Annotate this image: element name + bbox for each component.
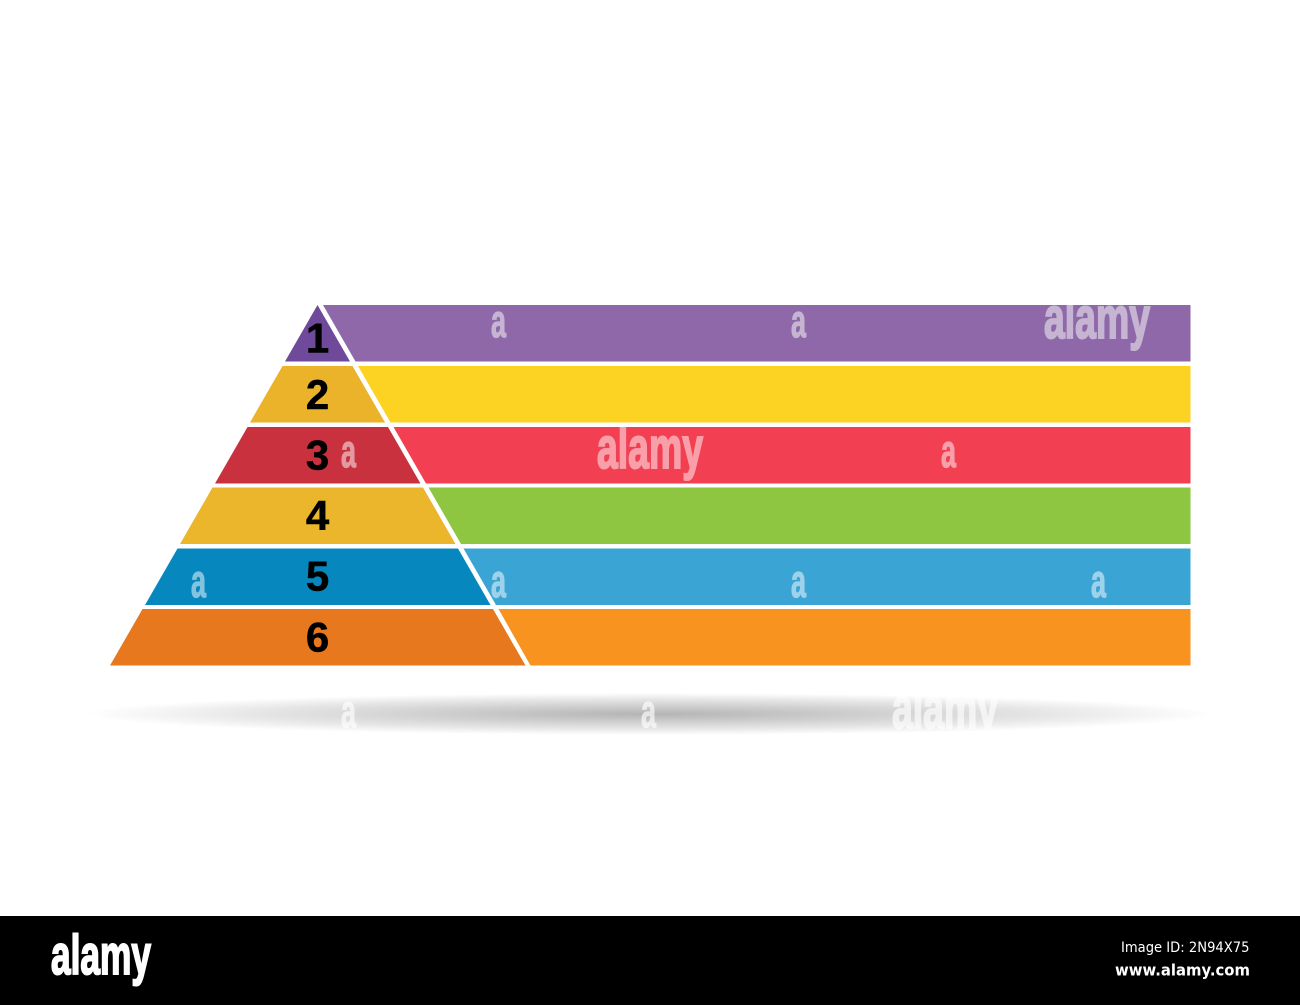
number 2: 2 <box>306 371 329 418</box>
watermark row 5 left: a <box>491 555 506 607</box>
bar 4 green <box>428 488 1190 544</box>
ground shadow <box>85 693 1215 735</box>
number 1: 1 <box>306 314 329 362</box>
watermark row 1: a <box>491 295 506 347</box>
pyramid level 5 <box>145 548 490 605</box>
pyramid level 3 <box>215 427 420 484</box>
watermark row 3 left: a <box>341 425 356 477</box>
number 4: 4 <box>306 492 330 539</box>
watermark row 5 centre: a <box>791 555 806 607</box>
pyramid level 6 <box>110 609 526 666</box>
infographic canvas <box>0 305 1300 1005</box>
bar 6 orange <box>498 609 1190 666</box>
watermark logo row 3: alamy <box>597 416 703 481</box>
bar 2 yellow <box>358 366 1190 422</box>
number 3: 3 <box>306 432 329 478</box>
watermark logo shadow: alamy <box>892 676 998 741</box>
footer background <box>0 916 1300 1005</box>
watermark row 5 right: a <box>1091 555 1106 607</box>
website: www.alamy.com <box>1115 960 1250 980</box>
bar 3 red <box>394 427 1190 484</box>
level numbers <box>306 314 330 660</box>
footer logo: alamy <box>51 923 151 986</box>
watermarks <box>191 286 1150 741</box>
watermark row 3 right: a <box>941 425 956 477</box>
watermark shadow centre: a <box>641 685 656 737</box>
image id: Image ID: 2N94X75 <box>1121 940 1250 956</box>
bar 1 purple <box>323 305 1190 362</box>
number 5: 5 <box>306 552 329 600</box>
panel: colored bars <box>323 305 1190 666</box>
footer bar <box>0 916 1300 1005</box>
watermark logo row 1: alamy <box>1044 286 1150 351</box>
watermark row 1 centre: a <box>791 295 806 347</box>
pyramid level 2 <box>250 366 385 422</box>
pyramid level 1 <box>285 305 350 362</box>
bar 5 blue <box>464 548 1190 605</box>
number 6: 6 <box>306 614 329 660</box>
pyramid level 4 <box>180 488 456 544</box>
watermark shadow left: a <box>341 685 356 737</box>
watermark row 5 far left: a <box>191 555 206 607</box>
panel: pyramid <box>110 305 526 666</box>
